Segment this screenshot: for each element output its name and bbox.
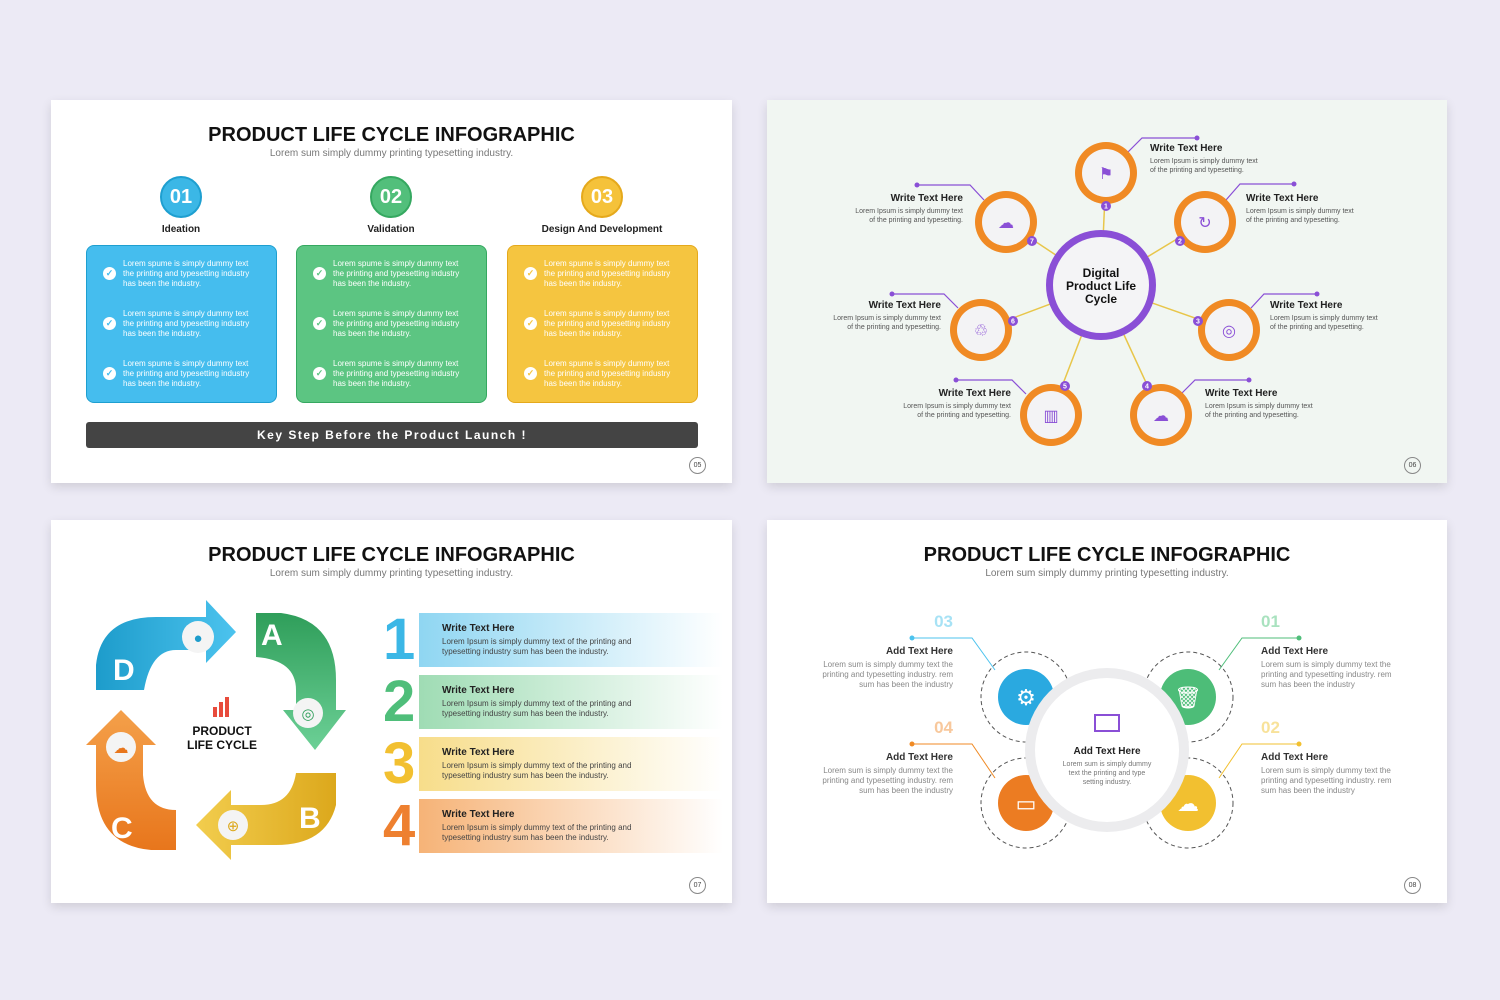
node text 2: Lorem Ipsum is simply dummy text	[1246, 208, 1354, 215]
arrow cycle: D	[113, 654, 135, 687]
center label: PRODUCT	[192, 724, 252, 738]
arrow cycle: ⊕	[227, 818, 239, 835]
node text 2: Write Text Here	[1246, 193, 1318, 204]
box ideation: the printing and typesetting industry	[123, 269, 249, 278]
row 2	[383, 669, 698, 734]
box ideation	[86, 245, 277, 403]
arrow cycle: ◎	[301, 706, 315, 723]
radial diagram: 3	[1196, 318, 1200, 326]
center hub: Add Text Here	[1073, 746, 1141, 757]
box ideation: Lorem spume is simply dummy text	[123, 259, 248, 268]
hub diagram: ⚙	[1016, 685, 1036, 710]
row 4: Write Text Here	[442, 809, 514, 820]
item 01: 01	[1261, 612, 1280, 631]
row 4: typesetting industry sum has been the industry.	[442, 833, 609, 842]
node text 7: Lorem Ipsum is simply dummy text	[855, 208, 963, 215]
row 1: Write Text Here	[442, 623, 514, 634]
box ideation: ✓	[106, 268, 113, 278]
box validation: ✓	[316, 268, 323, 278]
center hub	[1025, 668, 1189, 832]
radial diagram: ☁	[1153, 408, 1169, 425]
center label	[187, 697, 257, 752]
node text 3: Write Text Here	[1270, 300, 1342, 311]
title: PRODUCT LIFE CYCLE INFOGRAPHIC	[208, 124, 575, 146]
radial diagram: 1	[1104, 204, 1108, 210]
node text 6	[833, 300, 941, 331]
center circle: Cycle	[1085, 292, 1117, 306]
arrow cycle: C	[111, 812, 133, 845]
arrow cycle: A	[261, 619, 283, 652]
row 2: 2	[383, 669, 415, 734]
node text 5: Write Text Here	[939, 388, 1011, 399]
item 03: 03	[934, 612, 953, 631]
row 2: typesetting industry sum has been the industry.	[442, 709, 609, 718]
radial diagram	[890, 136, 1320, 446]
item 02: sum has been the industry	[1261, 786, 1355, 795]
box ideation: the printing and typesetting industry	[123, 369, 249, 378]
box validation: Lorem spume is simply dummy text	[333, 259, 458, 268]
node text 4: of the printing and typesetting.	[1205, 412, 1299, 419]
node text 4: Lorem Ipsum is simply dummy text	[1205, 403, 1313, 410]
item 04	[822, 718, 953, 795]
radial diagram: ☁	[998, 215, 1014, 232]
row 2: Write Text Here	[442, 685, 514, 696]
page number: 07	[694, 882, 701, 889]
row 4: Lorem Ipsum is simply dummy text of the printing and	[442, 823, 631, 832]
radial diagram: ⚑	[1099, 166, 1113, 183]
box design: has been the industry.	[544, 329, 622, 338]
box ideation: has been the industry.	[123, 279, 201, 288]
row 4: 4	[383, 793, 415, 858]
item 04: Add Text Here	[886, 752, 953, 763]
page number: 08	[1409, 882, 1416, 889]
step 01 badge: 01	[170, 186, 192, 208]
radial diagram: 6	[1011, 318, 1015, 326]
node text 5: Lorem Ipsum is simply dummy text	[903, 403, 1011, 410]
item 03: Lorem sum is simply dummy text the	[823, 660, 953, 669]
box validation: has been the industry.	[333, 279, 411, 288]
node text 4	[1205, 388, 1313, 419]
node text 5	[903, 388, 1011, 419]
node text 7: of the printing and typesetting.	[869, 217, 963, 224]
node text 2: of the printing and typesetting.	[1246, 217, 1340, 224]
box validation: the printing and typesetting industry	[333, 319, 459, 328]
item 01: sum has been the industry	[1261, 680, 1355, 689]
arrow cycle: B	[299, 802, 321, 835]
arrow cycle: ☁	[114, 740, 128, 757]
node text 2	[1246, 193, 1354, 224]
box ideation: has been the industry.	[123, 329, 201, 338]
row 1: 1	[383, 607, 415, 672]
box ideation: the printing and typesetting industry	[123, 319, 249, 328]
radial diagram: 2	[1178, 238, 1182, 246]
row 3	[383, 731, 702, 796]
box design: Lorem spume is simply dummy text	[544, 309, 669, 318]
page number: 05	[694, 462, 701, 469]
row 3: 3	[383, 731, 415, 796]
row 1: typesetting industry sum has been the industry.	[442, 647, 609, 656]
box ideation: ✓	[106, 368, 113, 378]
row 1: Lorem Ipsum is simply dummy text of the printing and	[442, 637, 631, 646]
box ideation: has been the industry.	[123, 379, 201, 388]
box design	[507, 245, 698, 403]
box validation: Lorem spume is simply dummy text	[333, 359, 458, 368]
center circle: Product Life	[1066, 279, 1136, 293]
item 02	[1261, 718, 1392, 795]
box design: ✓	[527, 318, 534, 328]
node text 6: of the printing and typesetting.	[847, 324, 941, 331]
node text 1	[1150, 143, 1258, 174]
item 01: Add Text Here	[1261, 646, 1328, 657]
radial diagram: ◎	[1222, 323, 1236, 340]
box design: ✓	[527, 368, 534, 378]
page number	[1404, 457, 1421, 474]
item 03	[822, 612, 953, 689]
box ideation: Lorem spume is simply dummy text	[123, 309, 248, 318]
node text 3: Lorem Ipsum is simply dummy text	[1270, 315, 1378, 322]
item 02: Add Text Here	[1261, 752, 1328, 763]
node text 5: of the printing and typesetting.	[917, 412, 1011, 419]
panel: slide 06 radial cycle	[767, 100, 1447, 483]
center hub: text the printing and type	[1069, 770, 1145, 777]
radial diagram: 5	[1063, 384, 1067, 390]
center circle: Digital	[1083, 266, 1119, 280]
item 03: Add Text Here	[886, 646, 953, 657]
row 3: typesetting industry sum has been the industry.	[442, 771, 609, 780]
row 4	[383, 793, 704, 858]
row 3: Write Text Here	[442, 747, 514, 758]
subtitle: Lorem sum simply dummy printing typesetting industry.	[270, 568, 513, 579]
hub diagram: 🗑	[1174, 685, 1202, 710]
box validation: Lorem spume is simply dummy text	[333, 309, 458, 318]
hub diagram: ☁	[1177, 791, 1199, 816]
node text 7: Write Text Here	[891, 193, 963, 204]
row 2: Lorem Ipsum is simply dummy text of the printing and	[442, 699, 631, 708]
box validation: the printing and typesetting industry	[333, 269, 459, 278]
step 02 badge: 02	[380, 186, 402, 208]
step 02 badge	[370, 176, 412, 218]
arrow cycle: ●	[193, 630, 203, 647]
label validation: Validation	[367, 224, 415, 235]
box validation: ✓	[316, 368, 323, 378]
arrow cycle	[86, 600, 346, 860]
step 03 badge: 03	[591, 186, 613, 208]
box ideation: Lorem spume is simply dummy text	[123, 359, 248, 368]
box design: has been the industry.	[544, 279, 622, 288]
node text 3: of the printing and typesetting.	[1270, 324, 1364, 331]
radial diagram: ▥	[1043, 408, 1059, 425]
node text 6: Lorem Ipsum is simply dummy text	[833, 315, 941, 322]
item 02: Lorem sum is simply dummy text the	[1261, 766, 1391, 775]
page number	[689, 457, 706, 474]
center label: LIFE CYCLE	[187, 738, 257, 752]
box design: Lorem spume is simply dummy text	[544, 259, 669, 268]
box ideation: ✓	[106, 318, 113, 328]
panel: slide 07 arrows cycle	[51, 520, 732, 903]
radial diagram: 4	[1145, 384, 1149, 390]
page number	[689, 877, 706, 894]
item 04: sum has been the industry	[859, 786, 953, 795]
banner	[86, 422, 698, 448]
item 02: 02	[1261, 718, 1280, 737]
node text 1: of the printing and typesetting.	[1150, 167, 1244, 174]
box design: the printing and typesetting industry	[544, 269, 670, 278]
radial diagram: ♲	[974, 323, 988, 340]
step 01 badge	[160, 176, 202, 218]
item 02: printing and typesetting industry. rem	[1261, 776, 1392, 785]
page number	[1404, 877, 1421, 894]
item 03: sum has been the industry	[859, 680, 953, 689]
center hub: setting industry.	[1083, 779, 1131, 786]
item 04: printing and typesetting industry. rem	[822, 776, 953, 785]
subtitle: Lorem sum simply dummy printing typesetting industry.	[270, 148, 513, 159]
title: PRODUCT LIFE CYCLE INFOGRAPHIC	[208, 544, 575, 566]
title: PRODUCT LIFE CYCLE INFOGRAPHIC	[924, 544, 1290, 566]
item 03: printing and typesetting industry. rem	[822, 670, 953, 679]
item 01: printing and typesetting industry. rem	[1261, 670, 1392, 679]
hub diagram	[910, 636, 1302, 848]
box design: the printing and typesetting industry	[544, 319, 670, 328]
item 04: 04	[934, 718, 953, 737]
subtitle: Lorem sum simply dummy printing typesetting industry.	[985, 568, 1229, 579]
step 03 badge	[581, 176, 623, 218]
box validation: has been the industry.	[333, 379, 411, 388]
label ideation: Ideation	[162, 224, 200, 235]
box validation: has been the industry.	[333, 329, 411, 338]
item 01	[1261, 612, 1392, 689]
panel: slide 05 key steps	[51, 100, 732, 483]
label design: Design And Development	[542, 224, 662, 235]
node text 1: Write Text Here	[1150, 143, 1222, 154]
box validation: the printing and typesetting industry	[333, 369, 459, 378]
center hub: Lorem sum is simply dummy	[1063, 761, 1152, 768]
box design: Lorem spume is simply dummy text	[544, 359, 669, 368]
box design: ✓	[527, 268, 534, 278]
box design: the printing and typesetting industry	[544, 369, 670, 378]
row 3: Lorem Ipsum is simply dummy text of the printing and	[442, 761, 631, 770]
box design: has been the industry.	[544, 379, 622, 388]
radial diagram: 7	[1030, 238, 1034, 246]
radial diagram: ↻	[1198, 215, 1212, 232]
node text 3	[1270, 300, 1378, 331]
row 1	[383, 607, 700, 672]
item 01: Lorem sum is simply dummy text the	[1261, 660, 1391, 669]
box validation	[296, 245, 487, 403]
node text 6: Write Text Here	[869, 300, 941, 311]
item 04: Lorem sum is simply dummy text the	[823, 766, 953, 775]
box validation: ✓	[316, 318, 323, 328]
center circle	[1046, 230, 1156, 340]
node text 1: Lorem Ipsum is simply dummy text	[1150, 158, 1258, 165]
banner: Key Step Before the Product Launch !	[257, 428, 527, 442]
node text 4: Write Text Here	[1205, 388, 1277, 399]
hub diagram: ▭	[1016, 791, 1036, 816]
panel: slide 08 hub	[767, 520, 1447, 903]
node text 7	[855, 193, 963, 224]
page number: 06	[1409, 462, 1416, 469]
